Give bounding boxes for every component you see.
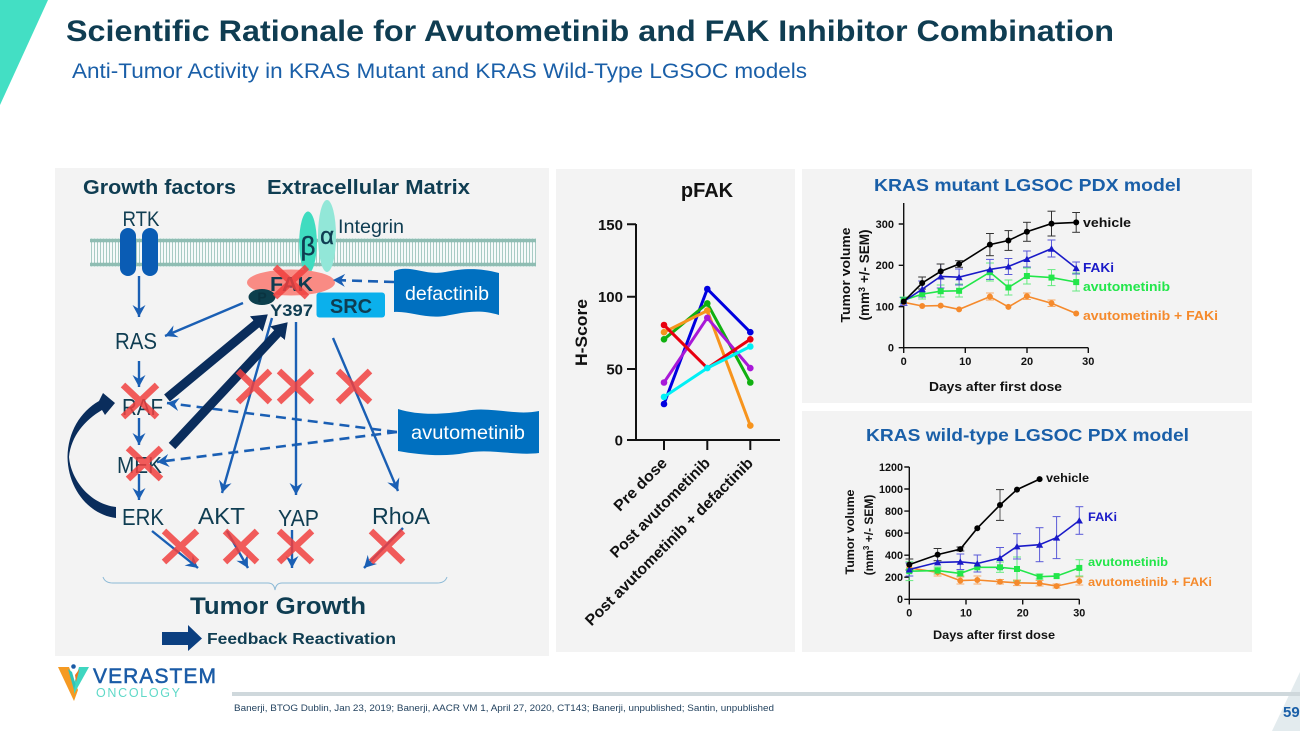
heading: growth factors: Growth factors (83, 177, 236, 199)
heading: extracellular matrix: Extracellular Matrix (267, 177, 470, 199)
RTK receptor (120, 208, 160, 276)
references: Banerji, BTOG Dublin, Jan 23, 2019; Banerji, AACR VM 1, April 27, 2020, CT143; Banerji, unpublished; Santin, unpublished (234, 703, 774, 714)
curved feedback arrow ERK to RAF (68, 393, 116, 518)
series labels: avutometinib (1083, 280, 1170, 294)
integrin: α (320, 223, 334, 250)
y tick labels: 50 (606, 362, 623, 378)
y axis label (845, 490, 876, 575)
integrin: β (301, 231, 315, 261)
series labels: vehicle (1083, 216, 1131, 230)
series labels: avutometinib (1088, 557, 1168, 569)
phospho site Y397 (248, 289, 313, 320)
legend: feedback reactivation: Feedback Reactivation (207, 631, 396, 648)
x axis label: Days after first dose (933, 629, 1056, 642)
y axis label: Tumor volume (839, 227, 853, 322)
tick labels: 0 (906, 608, 912, 620)
tick labels: 600 (885, 528, 903, 540)
axes (899, 203, 1088, 353)
y tick labels (598, 217, 623, 450)
thick feedback arrows to Y397 (167, 323, 279, 446)
phospho site Y397: P (257, 289, 267, 305)
y axis label: +/- SEM) (857, 230, 872, 287)
defactinib banner (394, 269, 499, 317)
tick labels: 200 (885, 572, 903, 584)
y tick labels: 0 (615, 432, 623, 450)
tick labels: 0 (888, 342, 894, 354)
SRC: SRC (330, 296, 372, 318)
panel: signaling pathway (55, 168, 549, 656)
pathway labels: ERK (122, 504, 164, 530)
axes (904, 467, 1079, 604)
panel: KRAS wild-type chart (802, 411, 1252, 652)
subtitle: Anti-Tumor Activity in KRAS Mutant and KRAS Wild-Type LGSOC models (72, 60, 807, 83)
title: Scientific Rationale for Avutometinib and FAK Inhibitor Combination (66, 15, 1114, 48)
SRC (316, 292, 385, 318)
x tick labels: Post avutometinib + defactinib (582, 455, 757, 629)
series labels: avutometinib + FAKi (1083, 309, 1218, 323)
error bars (904, 211, 1076, 306)
tick labels: 1000 (879, 484, 903, 496)
panel: KRAS mutant chart (802, 169, 1252, 403)
tick labels (879, 462, 1085, 620)
pathway labels: MEK (117, 452, 162, 478)
pathway labels: YAP (278, 505, 319, 531)
tick labels (876, 219, 1094, 368)
tick labels: 100 (876, 302, 894, 314)
series labels (1083, 216, 1218, 323)
tick labels: 400 (885, 550, 903, 562)
x tick labels: Post avutometinib (607, 455, 714, 562)
tumor growth label: Tumor Growth (190, 593, 366, 620)
page number: 59 (1283, 704, 1300, 721)
legend: feedback reactivation (162, 625, 396, 651)
series lines (904, 222, 1076, 314)
tick labels: 300 (876, 219, 894, 231)
series points (661, 286, 754, 429)
inhibitor dashed arrows (157, 280, 397, 462)
y axis label: (mm (857, 292, 872, 320)
series labels: FAKi (1083, 261, 1114, 275)
signaling arrows (139, 276, 403, 568)
pathway labels: RhoA (372, 503, 430, 529)
tick labels: 30 (1082, 356, 1094, 368)
y axis label: (mm (862, 550, 876, 575)
brace (103, 577, 447, 590)
y tick labels: 100 (598, 289, 623, 306)
tick labels: 10 (960, 608, 972, 620)
FAK: FAK (270, 274, 314, 296)
corner triangle bottom right (1272, 672, 1300, 731)
y axis label: Tumor volume (845, 489, 857, 575)
tick labels: 20 (1017, 608, 1029, 620)
series lines (909, 479, 1079, 586)
series labels (1046, 473, 1212, 589)
pathway labels (115, 328, 430, 531)
y axis label: 3 (857, 287, 867, 292)
defactinib banner: defactinib (405, 283, 489, 305)
pathway labels: RAF (122, 394, 163, 420)
FAK (247, 270, 335, 296)
tick labels: 30 (1073, 608, 1085, 620)
panel: pFAK chart (556, 169, 795, 652)
y axis label (839, 227, 872, 322)
series labels: FAKi (1088, 512, 1117, 524)
tick labels: 0 (897, 594, 903, 606)
tick labels: 20 (1021, 356, 1033, 368)
chart title: pFAK (681, 180, 734, 202)
y tick labels: 150 (598, 217, 623, 234)
x axis label: Days after first dose (929, 380, 1062, 394)
tick labels: 800 (885, 506, 903, 518)
axes (627, 224, 780, 450)
footer rule (232, 692, 1300, 696)
logo: Verastem Oncology (58, 664, 216, 701)
inhibition crosses (123, 267, 403, 562)
y axis label: +/- SEM) (862, 495, 876, 546)
logo: Verastem Oncology: VERASTEM (93, 665, 216, 688)
y axis label: 3 (862, 545, 871, 550)
series labels: vehicle (1046, 473, 1089, 485)
avutometinib banner (398, 409, 539, 455)
corner accent triangle (0, 0, 48, 105)
chart title: KRAS mutant LGSOC PDX model (874, 175, 1181, 195)
tick labels: 10 (959, 356, 971, 368)
tick labels: 1200 (879, 462, 903, 474)
RTK receptor: RTK (122, 208, 160, 231)
logo: Verastem Oncology: ONCOLOGY (96, 686, 181, 700)
x tick labels: Pre dose (611, 455, 671, 515)
chart title: KRAS wild-type LGSOC PDX model (866, 425, 1189, 445)
integrin: Integrin (338, 217, 404, 238)
pathway labels: RAS (115, 328, 157, 354)
tick labels: 0 (901, 356, 907, 368)
avutometinib banner: avutometinib (411, 422, 525, 444)
y axis label: H-Score (573, 299, 591, 366)
series lines (664, 289, 750, 426)
cell membrane (90, 238, 536, 267)
integrin (299, 200, 404, 274)
series labels: avutometinib + FAKi (1088, 577, 1212, 589)
error bars (909, 490, 1079, 588)
tick labels: 200 (876, 260, 894, 272)
pathway labels: AKT (198, 503, 245, 529)
phospho site Y397: Y397 (270, 302, 313, 320)
